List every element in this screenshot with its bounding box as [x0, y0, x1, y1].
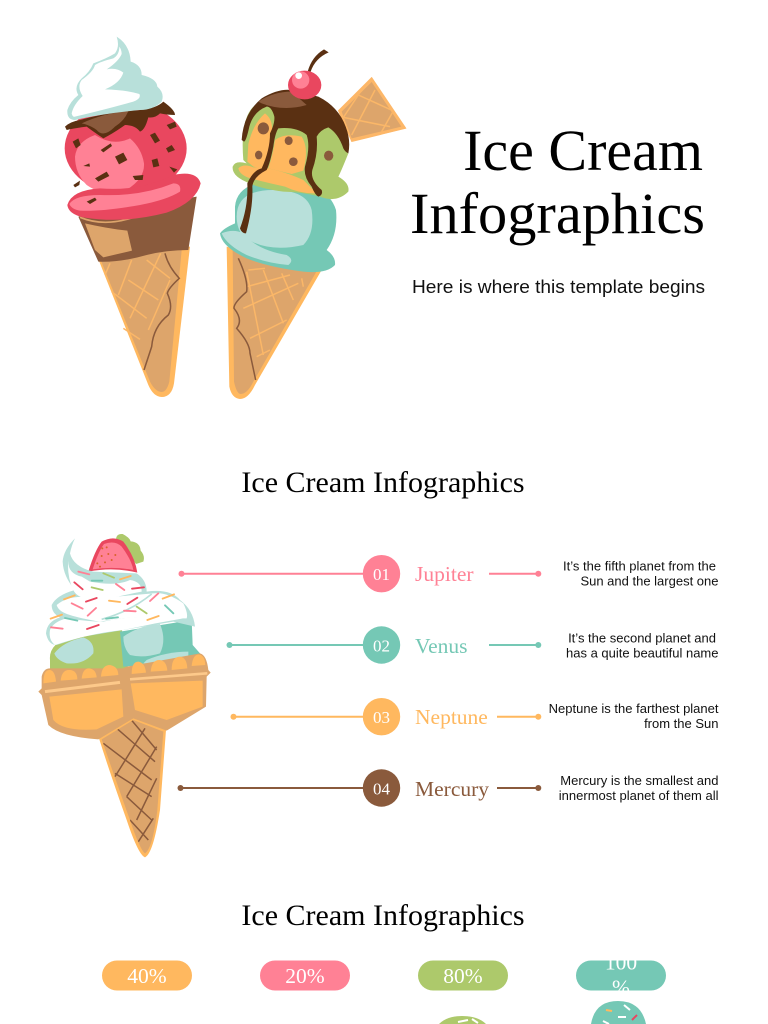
- description: [563, 558, 718, 588]
- number badge: [363, 555, 400, 592]
- title: Infographics: [410, 181, 705, 246]
- connector right: [497, 714, 541, 720]
- dot: [178, 785, 184, 791]
- row: Jupiter: [178, 555, 718, 592]
- row: Mercury: [178, 769, 719, 807]
- description: [566, 630, 718, 660]
- pill: 40%: 40%: [127, 964, 167, 988]
- mint scoop: [220, 180, 336, 272]
- connector left: [229, 644, 363, 646]
- subtitle: Here is where this template begins: [412, 277, 705, 297]
- cone body: [96, 247, 190, 397]
- pill: 100%: 100: [605, 950, 637, 974]
- icon: green scoop top: [439, 1016, 486, 1024]
- sprinkles: [51, 572, 174, 629]
- description: has a quite beautiful name: [566, 646, 718, 660]
- title: Ice Cream: [463, 118, 703, 183]
- description: Sun and the largest one: [580, 574, 718, 588]
- number badge: [363, 626, 400, 664]
- dot: [230, 714, 236, 720]
- icon: cherry and chocolate ice cream cone: [220, 49, 406, 399]
- icon: strawberry sprinkles ice cream cone: [38, 534, 211, 857]
- heading: section two: Ice Cream Infographics: [241, 899, 525, 932]
- number badge: 02: [373, 636, 390, 656]
- green and orange scoop: [233, 107, 349, 199]
- title: [410, 118, 705, 246]
- pill: 100%: %: [612, 976, 630, 1000]
- whipped cream: [67, 37, 163, 120]
- connector left: [180, 787, 363, 789]
- pill: 80%: [418, 960, 508, 990]
- wafer stick: [338, 77, 406, 142]
- strawberry: [88, 534, 144, 573]
- chocolate dip: [78, 197, 197, 262]
- icon: teal scoop top: [591, 1001, 646, 1024]
- row: Venus: [226, 626, 718, 664]
- dot: [226, 642, 232, 648]
- pill: 20%: 20%: [285, 964, 325, 988]
- description: Neptune is the farthest planet: [549, 701, 719, 716]
- pill: 100%: [576, 950, 666, 1000]
- dot: [178, 571, 184, 577]
- chocolate topping: [65, 102, 175, 138]
- pill: 40%: [102, 960, 192, 990]
- row: Neptune: [230, 698, 719, 735]
- description: from the Sun: [644, 716, 718, 731]
- number badge: [363, 698, 400, 735]
- number badge: 04: [373, 780, 390, 798]
- connector right: [489, 571, 541, 577]
- description: [549, 701, 719, 731]
- mint and green scoops: [50, 620, 200, 672]
- description: Mercury is the smallest and: [560, 773, 718, 788]
- cone body: [99, 717, 166, 857]
- cone body: [227, 247, 322, 399]
- chocolate sauce: [240, 90, 349, 233]
- number badge: 03: [373, 708, 390, 727]
- connector right: [489, 642, 541, 648]
- description: innermost planet of them all: [559, 788, 719, 803]
- connector left: [181, 573, 363, 575]
- strawberry scoop: [65, 102, 201, 220]
- pill: 80%: 80%: [443, 964, 483, 988]
- number badge: 01: [373, 565, 390, 584]
- description: [559, 773, 719, 803]
- label: Jupiter: [415, 562, 474, 586]
- heading: section one: Ice Cream Infographics: [241, 466, 525, 499]
- connector left: [233, 716, 363, 718]
- icon: strawberry chocolate ice cream cone: [65, 37, 201, 397]
- label: Venus: [415, 634, 468, 658]
- label: Mercury: [415, 777, 489, 801]
- pill: 20%: [260, 960, 350, 990]
- label: Neptune: [415, 705, 488, 729]
- connector right: [497, 785, 541, 791]
- wafer bowls: [38, 653, 211, 739]
- whipped cream: [46, 538, 195, 645]
- cherry: [288, 49, 329, 99]
- number badge: [363, 769, 400, 807]
- description: It’s the second planet and: [568, 630, 716, 646]
- description: It’s the fifth planet from the: [563, 558, 716, 574]
